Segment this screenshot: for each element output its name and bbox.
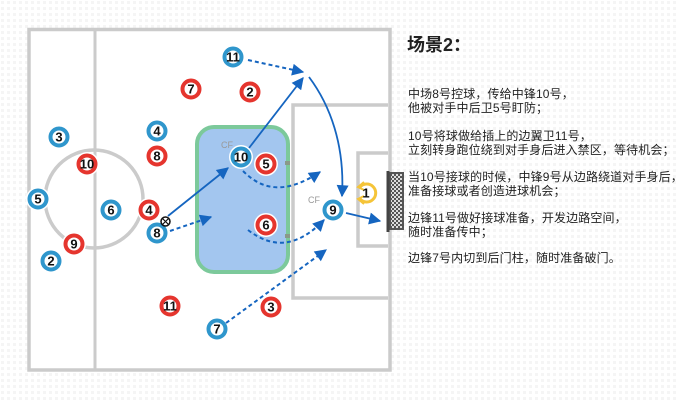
player numbers [34,50,370,336]
red team players [66,80,280,316]
description text: 当10号接球的时候，中锋9号从边路绕道对手身后， [408,170,677,184]
player numbers: 11 [163,298,177,314]
description text: 10号将球做给插上的边翼卫11号， [408,129,592,143]
description text: 边锋11号做好接球准备，开发边路空间， [408,211,627,225]
player numbers: 9 [70,236,78,252]
description text: 中场8号控球，传给中锋10号， [408,87,574,101]
position labels: CF [221,140,320,238]
highlighted zone [197,127,288,272]
player numbers: 6 [262,218,270,232]
player numbers: 6 [107,202,115,218]
pitch [29,30,390,370]
player numbers: 2 [246,84,254,100]
description text: 随时准备传中； [408,225,493,239]
player numbers: 4 [145,202,153,218]
player numbers: 7 [187,82,195,96]
player numbers: 7 [213,322,221,336]
goalkeeper [358,182,376,204]
player numbers: 3 [55,130,63,144]
player numbers: 10 [234,150,248,164]
player numbers: 5 [262,156,270,172]
player numbers: 5 [34,192,42,206]
player numbers: 8 [153,226,161,240]
description text: 他被对手中后卫5号盯防； [408,101,548,115]
player numbers: 11 [226,50,240,64]
player numbers: 8 [153,148,161,164]
passing and movement arrows [168,60,380,323]
blue team players [30,48,342,338]
description text: 准备接球或者创造进球机会； [408,184,566,198]
description text: 边锋7号内切到后门柱，随时准备破门。 [408,251,621,265]
title: 场景2： [407,35,471,55]
player numbers: 10 [80,156,94,172]
position labels: CF: CF [308,195,320,205]
position labels: CF: CF [221,140,233,150]
player numbers: 2 [47,254,55,268]
icon: ball [161,217,170,226]
white halos behind overlapping players [26,145,345,256]
player numbers: 3 [267,300,275,314]
player numbers: 1 [362,186,370,200]
description text: 立刻转身跑位绕到对手身后进入禁区，等待机会； [408,143,675,157]
player numbers: 9 [329,202,337,218]
player numbers: 4 [153,124,161,138]
goal [386,171,403,232]
